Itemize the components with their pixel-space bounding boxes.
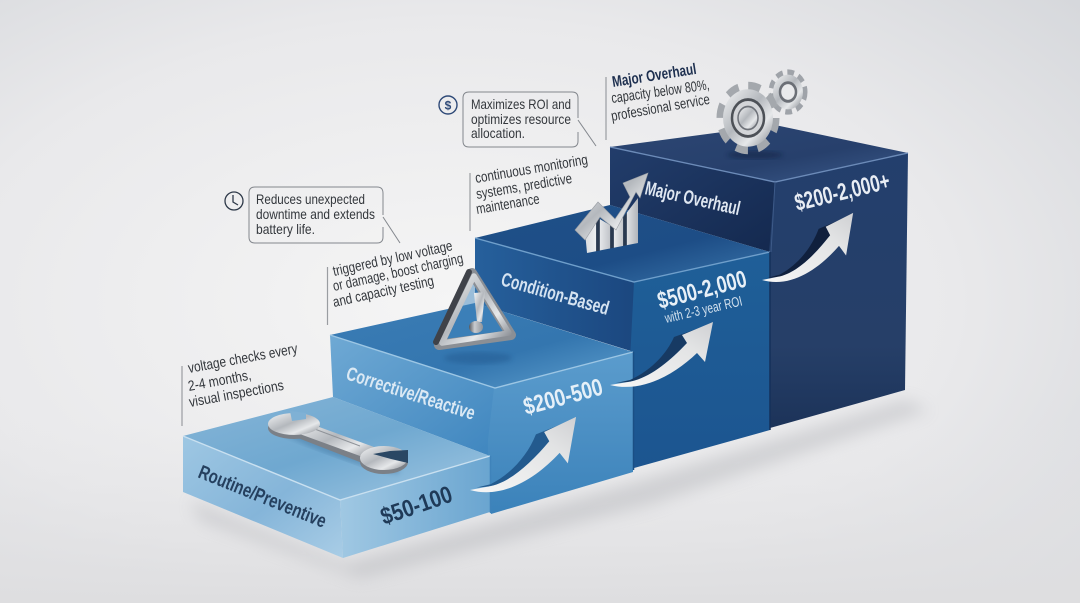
annotation: major overhaul: Major Overhaul xyxy=(611,61,698,91)
annotation: routine xyxy=(182,341,299,426)
icon: gears xyxy=(720,73,804,159)
annotation: major overhaul xyxy=(606,61,711,140)
step 2: Corrective/Reactive xyxy=(330,303,634,514)
price: $50-100: $50-100 xyxy=(377,481,456,531)
callout: downtime benefit: downtime and extends xyxy=(256,206,375,222)
price: $200-2,000+: $200-2,000+ xyxy=(792,168,893,217)
annotation: corrective xyxy=(328,238,465,325)
step 3: Condition-Based xyxy=(475,205,770,468)
label: Corrective/Reactive: Corrective/Reactive xyxy=(343,363,478,425)
floor shadow xyxy=(190,400,930,578)
icon: wrench xyxy=(268,411,408,479)
annotation: condition-based: continuous monitoring xyxy=(474,152,589,187)
icon: rising chart arrow xyxy=(575,173,648,253)
arrow: step 1 to step 2 xyxy=(470,417,576,492)
annotation: condition-based: systems, predictive xyxy=(475,171,573,203)
annotation: corrective: or damage, boost charging xyxy=(331,251,465,295)
price: $500-2,000: $500-2,000 xyxy=(655,266,750,315)
annotation: condition-based: maintenance xyxy=(475,191,541,218)
callout: downtime benefit: battery life. xyxy=(256,221,315,237)
step 1: Routine/Preventive xyxy=(183,397,490,558)
annotation: corrective: and capacity testing xyxy=(331,273,435,311)
icon: dollar: $ xyxy=(445,98,452,112)
icon: warning triangle xyxy=(436,272,512,364)
annotation: routine: 2-4 months, xyxy=(187,368,253,395)
callout: ROI benefit: allocation. xyxy=(471,125,525,141)
annotation: condition-based xyxy=(470,152,589,231)
label: Routine/Preventive: Routine/Preventive xyxy=(195,461,330,533)
label: Major Overhaul on block: Major Overhaul xyxy=(643,177,742,220)
callout: downtime benefit: Reduces unexpected xyxy=(256,191,365,207)
arrow: step 2 to step 3 xyxy=(610,322,713,387)
annotation: major overhaul: professional service xyxy=(610,92,711,125)
annotation: routine: voltage checks every xyxy=(187,341,299,377)
annotation: major overhaul: capacity below 80%, xyxy=(610,77,711,107)
callout: ROI benefit: optimizes resource xyxy=(471,111,571,127)
annotation: corrective: triggered by low voltage xyxy=(331,238,454,280)
label: Condition-Based: Condition-Based xyxy=(499,269,611,320)
callout: downtime benefit xyxy=(249,187,400,243)
annotation: routine: visual inspections xyxy=(188,378,285,411)
icon: clock xyxy=(225,192,243,210)
callout: ROI benefit: Maximizes ROI and xyxy=(471,96,571,112)
price note: with 2-3 year ROI: with 2-3 year ROI xyxy=(662,293,744,326)
callout: ROI benefit xyxy=(463,92,596,147)
arrow: step 3 to step 4 xyxy=(762,213,853,282)
step 4: Major Overhaul xyxy=(610,125,908,428)
icon: dollar xyxy=(439,96,457,114)
price: $200-500: $200-500 xyxy=(521,374,606,421)
